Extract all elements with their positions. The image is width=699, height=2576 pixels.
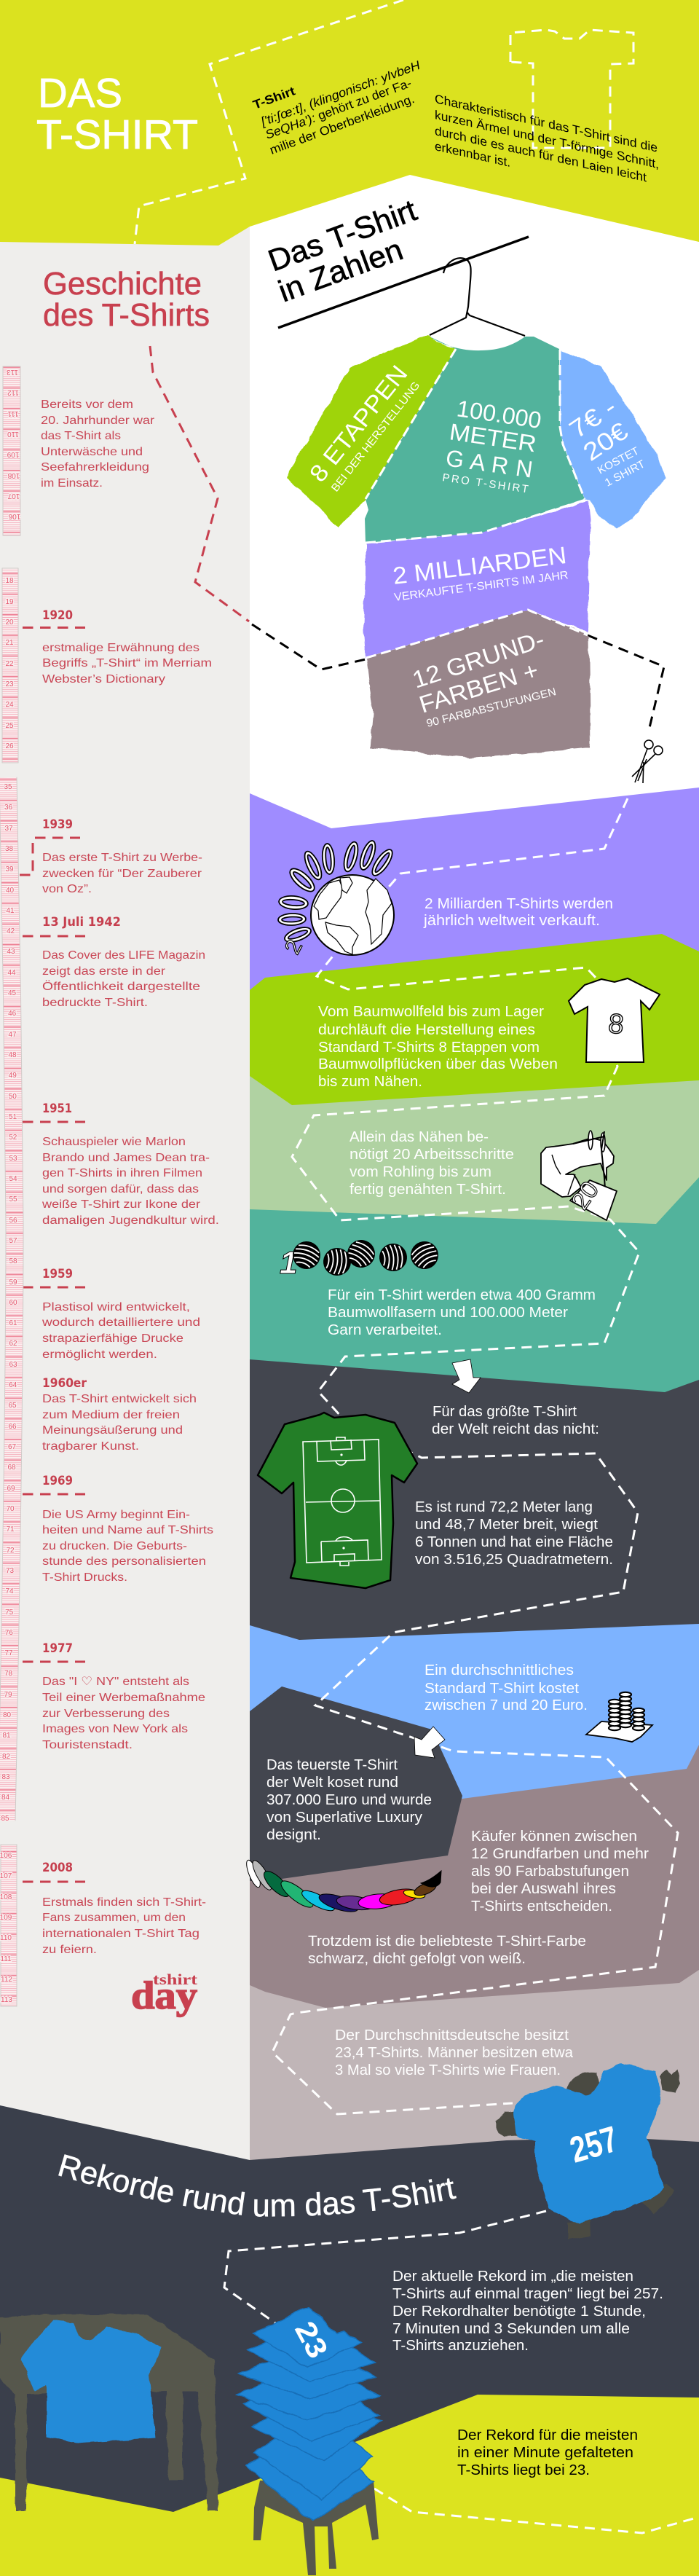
text: 20 Arbeitsschritte <box>350 1129 514 1198</box>
label: 100.000 Meter Garn <box>441 395 543 496</box>
label: price: 20€ <box>578 417 633 467</box>
timeline 1939: Das erste T-Shirt zu Werbe- <box>42 852 202 864</box>
text: price <box>424 1662 588 1713</box>
panel: purple band <box>250 788 699 1020</box>
timeline 2008 <box>23 1861 206 1956</box>
text: record 257: 7 Minuten und 3 Sekunden um alle <box>392 2321 630 2337</box>
measuring tape 3: 62 <box>9 1340 17 1348</box>
label: 12 Grundfarben: 90 FARBABSTUFUNGEN <box>425 686 558 730</box>
timeline 1951: damaligen Jugendkultur wird. <box>42 1214 219 1227</box>
text: price: Standard T-Shirt kostet <box>424 1681 579 1697</box>
measuring tape 3: 73 <box>6 1567 14 1575</box>
title: T-SHIRT <box>36 111 198 158</box>
text: colours: T-Shirts entscheiden. <box>471 1898 612 1915</box>
timeline 2008: internationalen T-Shirt Tag <box>42 1928 200 1940</box>
text: yarn: Baumwollfasern und 100.000 Meter <box>328 1305 568 1321</box>
text: most expensive shirt <box>266 1757 432 1843</box>
text: 8 Etappen <box>318 1004 558 1090</box>
measuring tape 1: 107 <box>7 492 20 500</box>
measuring tape 3: 55 <box>9 1195 17 1203</box>
text: most expensive shirt: der Welt koset rund <box>266 1775 398 1791</box>
characteristic text: erkennbar ist. <box>435 138 510 170</box>
blue shirt <box>514 2064 664 2223</box>
text: record 23: T-Shirts liegt bei 23. <box>457 2462 590 2478</box>
panel: light mauve band <box>250 1960 699 2171</box>
panel: yellow footer <box>0 2395 699 2576</box>
mauve hem: colours <box>366 610 591 758</box>
measuring tape 1 <box>3 366 20 535</box>
title <box>36 70 198 158</box>
text: most expensive shirt: 307.000 Euro und wurde <box>266 1792 432 1808</box>
measuring tape 3: 83 <box>1 1773 10 1781</box>
label: 2 Milliarden: 2 MILLIARDEN <box>391 541 568 589</box>
measuring tape 2: 23 <box>5 680 14 688</box>
timeline 1960er: tragbarer Kunst. <box>42 1440 139 1453</box>
earth <box>311 875 394 955</box>
timeline 1960er: zum Medium der freien <box>42 1409 180 1421</box>
panel: dark band with most expensive shirt <box>250 1686 462 1881</box>
measuring tape 2: 19 <box>5 598 14 606</box>
text: 20 Arbeitsschritte: vom Rohling bis zum <box>350 1164 491 1180</box>
timeline 1951: weiße T-Shirt zur Ikone der <box>42 1198 201 1211</box>
text: German average <box>335 2027 574 2078</box>
text: largest shirt facts: und 48,7 Meter breit, wiegt <box>415 1517 598 1533</box>
number 257: 257 <box>566 2118 623 2171</box>
measuring tape 3: 52 <box>9 1134 17 1142</box>
panel: blue band <box>250 1617 699 1814</box>
timeline 1942: Öffentlichkeit dargestellte <box>42 980 200 993</box>
measuring tape 4: 110 <box>0 1934 12 1942</box>
measuring tape 3: 65 <box>8 1402 17 1410</box>
text: record 23: Der Rekord für die meisten <box>457 2427 638 2443</box>
panel: mauve band <box>250 1745 699 2008</box>
timeline 1959: 1959 <box>42 1267 73 1281</box>
text: German average: Der Durchschnittsdeutsche besitzt <box>335 2027 569 2043</box>
panel: grey paper history column <box>0 227 250 2160</box>
measuring tape 3: 54 <box>9 1175 17 1183</box>
timeline 1969: T-Shirt Drucks. <box>42 1571 127 1584</box>
measuring tape 1: 112 <box>7 388 19 396</box>
icon: coins and banknotes <box>586 1692 652 1742</box>
text: most expensive shirt: designt. <box>266 1827 321 1843</box>
icon: person wearing 257 shirts <box>495 2064 681 2240</box>
heading: Rekorde rund um das T-Shirt: Rekorde rund um das T-Shirt <box>58 2154 457 2217</box>
timeline 1951: Schauspieler wie Marlon <box>42 1136 186 1148</box>
timeline 1969: stunde des personalisierten <box>42 1555 206 1568</box>
measuring tape 3: 51 <box>9 1113 17 1121</box>
dashed stitch: header white <box>135 0 403 244</box>
timeline 1959 <box>23 1267 200 1361</box>
measuring tape 4: 112 <box>1 1976 12 1984</box>
label: price: 7€ - <box>564 393 622 444</box>
label: 8 Etappen: 8 ETAPPEN <box>304 360 413 487</box>
measuring tape 3: 72 <box>6 1547 15 1555</box>
text: record 257: T-Shirts auf einmal tragen“ liegt bei 257. <box>392 2286 663 2302</box>
text: yarn: Für ein T-Shirt werden etwa 400 Gramm <box>328 1287 596 1303</box>
measuring tape 3: 36 <box>4 804 12 812</box>
text: colours: 12 Grundfarben und mehr <box>471 1846 649 1862</box>
measuring tape 3: 67 <box>8 1443 16 1451</box>
timeline 1969: zu drucken. Die Geburts- <box>42 1540 187 1552</box>
timeline 1951: gen T-Shirts in ihren Filmen <box>42 1167 202 1179</box>
measuring tape 3: 64 <box>9 1381 17 1389</box>
definition text: T-Shirt <box>251 84 297 112</box>
panel: dark records section <box>0 2105 699 2521</box>
background: yellow header <box>0 0 699 251</box>
measuring tape 1: 109 <box>7 450 19 458</box>
measuring tape 3: 82 <box>2 1753 10 1761</box>
measuring tape 4 <box>0 1845 17 2006</box>
timeline 1959: ermöglicht werden. <box>42 1348 157 1361</box>
measuring tape 3 <box>1 777 17 1823</box>
timeline 1939: 1939 <box>42 817 73 832</box>
timeline 1951: 1951 <box>42 1102 72 1116</box>
zeros and two <box>278 839 396 945</box>
heading: Geschichte des T-Shirts <box>43 266 210 333</box>
icon: globe with 2.000.000.000 <box>278 839 396 958</box>
measuring tape 4: 113 <box>1 1996 12 2004</box>
history intro text: das T-Shirt als <box>41 430 121 442</box>
hands, feet and head <box>495 2069 681 2240</box>
label: 100.000 Meter Garn: PRO T-SHIRT <box>441 471 529 496</box>
timeline 1951: und sorgen dafür, dass das <box>42 1183 199 1195</box>
text: price: Ein durchschnittliches <box>424 1662 574 1678</box>
icon: yarn balls 100.000: 1 <box>280 1245 297 1281</box>
icon: football pitch t-shirt <box>258 1413 417 1588</box>
timeline 1959: wodurch detailliertere und <box>42 1316 200 1329</box>
label: price: KOSTET <box>596 444 641 477</box>
measuring tape 2: 21 <box>5 639 14 647</box>
measuring tape 3: 59 <box>9 1279 17 1287</box>
heading: Geschichte des T-Shirts: des T-Shirts <box>43 297 210 333</box>
measuring tape 3: 58 <box>9 1257 17 1265</box>
shirt dashes <box>366 349 588 658</box>
label: 100.000 Meter Garn: G A R N <box>444 444 534 483</box>
history intro text: 20. Jahrhunder war <box>41 415 155 427</box>
text: 20 Arbeitsschritte: fertig genähten T-Shirt. <box>350 1182 506 1198</box>
label: price: 1 SHIRT <box>603 458 647 490</box>
measuring tape 3: 53 <box>9 1155 17 1163</box>
label: 100.000 Meter Garn: 100.000 <box>455 395 543 433</box>
measuring tape 3: 78 <box>4 1670 12 1678</box>
label: 12 Grundfarben: 12 GRUND- <box>409 625 548 694</box>
icon: twisted colour rope <box>244 1858 441 1915</box>
timeline 1920: Webster’s Dictionary <box>42 673 165 686</box>
measuring tape 4: 107 <box>0 1872 12 1880</box>
text: most popular colour: schwarz, dicht gefolgt von weiß. <box>308 1951 526 1967</box>
measuring tape 3: 63 <box>9 1361 17 1369</box>
text: colours: als 90 Farbabstufungen <box>471 1864 629 1880</box>
definition text: SeQHa'): gehört zu der Fa- <box>264 76 414 142</box>
dashed stitch: white in records section <box>224 2211 546 2324</box>
definition text: ['ti:ʃœ:t], (klingonisch: yIvbeH <box>258 58 422 129</box>
dashed stitch: white in footer <box>374 2489 699 2533</box>
measuring tape 1: 113 <box>7 368 18 376</box>
digit two: 2 <box>280 936 307 958</box>
text: largest shirt facts: von 3.516,25 Quadratmetern. <box>415 1552 613 1568</box>
icon: sewing machine with 20 <box>541 1131 617 1220</box>
measuring tape 3: 43 <box>7 948 15 956</box>
icon: scissors <box>632 740 663 783</box>
panel: dark band largest shirt <box>250 1348 699 1640</box>
measuring tape 3: 84 <box>1 1794 9 1802</box>
measuring tape 3: 47 <box>8 1031 17 1039</box>
timeline 1920: 1920 <box>42 608 73 623</box>
timeline 1920: erstmalige Erwähnung des <box>42 642 200 654</box>
timeline 1942: 13 Juli 1942 <box>42 915 121 930</box>
measuring tape 1: 108 <box>7 471 20 479</box>
measuring tape 3: 70 <box>6 1505 15 1513</box>
number 23: 23 <box>288 2317 333 2363</box>
measuring tape 3: 60 <box>9 1299 17 1307</box>
text: yarn: Garn verarbeitet. <box>328 1322 442 1338</box>
label: 12 Grundfarben <box>409 625 558 730</box>
measuring tape 3: 45 <box>8 989 16 997</box>
timeline 1939 <box>20 817 202 895</box>
text: largest shirt facts: Es ist rund 72,2 Meter lang <box>415 1499 593 1515</box>
timeline 1942: Das Cover des LIFE Magazin <box>42 949 205 962</box>
measuring tape 3: 38 <box>5 845 13 853</box>
measuring tape 4: 111 <box>0 1955 12 1963</box>
timeline 2008: Fans zusammen, um den <box>42 1912 186 1924</box>
measuring tape 3: 57 <box>9 1237 17 1245</box>
text: 2 Milliarden <box>423 896 613 929</box>
measuring tape 3: 39 <box>5 865 14 873</box>
measuring tape 2: 18 <box>5 577 14 585</box>
arrow: down to largest shirt <box>452 1359 481 1393</box>
arrow: to most expensive shirt <box>414 1727 445 1758</box>
dashed stitch: t-shirt outline <box>510 30 633 148</box>
heading: Das T-Shirt in Zahlen: Das T-Shirt <box>264 192 422 278</box>
measuring tape 3: 46 <box>8 1010 17 1018</box>
icon: stack of folded shirts <box>237 2307 381 2521</box>
timeline 1960er: 1960er <box>42 1376 87 1391</box>
heading: Geschichte des T-Shirts: Geschichte <box>43 266 202 302</box>
measuring tape 4: 109 <box>0 1914 12 1922</box>
icon: table with folded shirt <box>0 2314 218 2510</box>
blue shirt on table <box>20 2320 162 2443</box>
text: 8 Etappen: Baumwollpflücken über das Weben <box>318 1056 558 1072</box>
title: DAS <box>38 70 122 117</box>
heading: Das T-Shirt in Zahlen: in Zahlen <box>274 232 407 308</box>
text: colours: bei der Auswahl ihres <box>471 1881 616 1897</box>
panel: green band <box>250 934 699 1105</box>
text: colours: Käufer können zwischen <box>471 1829 637 1845</box>
label: 2 Milliarden: VERKAUFTE T-SHIRTS IM JAHR <box>393 569 569 604</box>
text: largest shirt intro <box>432 1404 599 1437</box>
history intro text: im Einsatz. <box>41 477 103 490</box>
table <box>0 2314 218 2510</box>
measuring tape 3: 85 <box>1 1815 9 1823</box>
measuring tape 3: 40 <box>6 887 14 895</box>
timeline 1959: strapazierfähige Drucke <box>42 1332 183 1345</box>
text: record 257 <box>392 2269 663 2354</box>
label: 2 Milliarden <box>391 541 569 604</box>
text: largest shirt intro: Für das größte T-Shirt <box>433 1404 577 1420</box>
dashed stitch: black in numbers section <box>252 624 664 731</box>
characteristic text <box>435 91 659 185</box>
blue sleeve: price <box>560 350 666 529</box>
purple band: sold shirts <box>363 501 590 658</box>
text: record 23 <box>457 2427 638 2478</box>
timeline 1969: 1969 <box>42 1474 73 1488</box>
definition text <box>251 58 422 157</box>
text: yarn <box>328 1287 596 1338</box>
measuring tape 2: 26 <box>5 742 14 750</box>
text: 2 Milliarden: jährlich weltweit verkauft. <box>423 913 600 929</box>
characteristic text: Charakteristisch für das T-Shirt sind die <box>435 91 657 155</box>
timeline 1959: Plastisol wird entwickelt, <box>42 1301 190 1313</box>
timeline 1969 <box>23 1474 213 1584</box>
text: 8 Etappen: Vom Baumwollfeld bis zum Lager <box>318 1004 544 1020</box>
timeline 1977: Das "I ♡ NY" entsteht als <box>42 1676 189 1688</box>
measuring tape 1: 110 <box>7 430 19 438</box>
history intro text: Unterwäsche und <box>41 446 143 458</box>
text: record 257: Der aktuelle Rekord im „die meisten <box>392 2269 633 2285</box>
measuring tape 3: 61 <box>9 1319 17 1327</box>
measuring tape 3: 79 <box>4 1691 12 1699</box>
label: price <box>564 393 647 490</box>
text: colours <box>471 1829 649 1915</box>
measuring tape 2: 22 <box>5 660 14 668</box>
timeline 1942: bedruckte T-Shirt. <box>42 997 148 1009</box>
measuring tape 2: 20 <box>5 619 14 627</box>
icon: stool <box>253 2481 379 2575</box>
text: largest shirt facts: 6 Tonnen und hat eine Fläche <box>415 1534 613 1550</box>
text: 8 Etappen: durchläuft die Herstellung eines <box>318 1022 535 1038</box>
timeline 2008: 2008 <box>42 1861 73 1875</box>
text: most popular colour: Trotzdem ist die beliebteste T-Shirt-Farbe <box>308 1933 586 1949</box>
text: most expensive shirt: von Superlative Luxury <box>266 1810 422 1826</box>
label: 100.000 Meter Garn: METER <box>448 418 538 457</box>
timeline 1960er: Das T-Shirt entwickelt sich <box>42 1393 197 1405</box>
timeline 2008: zu feiern. <box>42 1944 97 1956</box>
timeline 1969: Die US Army beginnt Ein- <box>42 1509 190 1521</box>
measuring tape 3: 48 <box>8 1051 17 1059</box>
text: record 257: Der Rekordhalter benötigte 1 Stunde, <box>392 2304 646 2320</box>
timeline 1977: 1977 <box>42 1641 73 1656</box>
measuring tape 3: 76 <box>5 1629 13 1637</box>
timeline 1977: Teil einer Werbemaßnahme <box>42 1692 205 1704</box>
icon: sewing machine with 20: 20 <box>566 1177 604 1215</box>
measuring tape 3: 66 <box>8 1423 17 1431</box>
measuring tape 2 <box>2 568 18 763</box>
measuring tape 3: 41 <box>6 907 15 915</box>
measuring tape 3: 42 <box>7 927 15 935</box>
sleeve: 8 Etappen <box>286 335 456 529</box>
measuring tape 3: 50 <box>9 1093 17 1101</box>
timeline 1977: Touristenstadt. <box>42 1739 133 1751</box>
history intro text: Seefahrerkleidung <box>41 461 149 474</box>
measuring tape 3: 49 <box>9 1072 17 1080</box>
logo: tshirt day: day <box>131 1974 197 2017</box>
icon: white shirt with 8 <box>569 978 660 1062</box>
measuring tape 3: 77 <box>4 1649 13 1657</box>
panel: teal band <box>250 1166 699 1392</box>
hanger with rail <box>278 237 529 336</box>
icon: yarn balls 100.000 <box>280 1235 443 1281</box>
timeline 1977: Images von New York als <box>42 1723 188 1735</box>
text: price: zwischen 7 und 20 Euro. <box>424 1697 588 1713</box>
timeline 1969: heiten und Name auf T-Shirts <box>42 1524 213 1536</box>
timeline 1951 <box>23 1102 219 1227</box>
text: 2 Milliarden: 2 Milliarden T-Shirts werden <box>424 896 613 912</box>
panel: pale green band <box>250 1064 699 1224</box>
timeline 1920: Begriffs „T-Shirt“ im Merriam <box>42 657 212 669</box>
timeline 1939: von Oz”. <box>42 883 92 895</box>
measuring tape 2: 25 <box>5 722 14 730</box>
characteristic text: kurzen Ärmel und der T-förmige Schnitt, <box>435 107 659 171</box>
measuring tape 3: 37 <box>4 825 13 833</box>
history intro text <box>41 398 155 490</box>
text: largest shirt facts <box>415 1499 613 1568</box>
timeline 1960er <box>42 1376 197 1453</box>
text: German average: 23,4 T-Shirts. Männer besitzen etwa <box>335 2045 574 2061</box>
timeline 1951: Brando und James Dean tra- <box>42 1152 210 1164</box>
measuring tape 3: 81 <box>2 1732 11 1740</box>
measuring tape 3: 35 <box>4 783 12 791</box>
measuring tape 4: 108 <box>0 1893 12 1901</box>
logo: tshirt day: tshirt <box>153 1971 197 1988</box>
timeline 1942 <box>23 915 205 1009</box>
text: largest shirt intro: der Welt reicht das nicht: <box>432 1421 599 1437</box>
panel: white numbers section <box>250 175 699 838</box>
measuring tape 1: 106 <box>8 512 20 520</box>
text: most expensive shirt: Das teuerste T-Shirt <box>266 1757 398 1773</box>
timeline 1977 <box>23 1641 205 1751</box>
pitch lines <box>303 1437 382 1566</box>
label: 12 Grundfarben: FARBEN + <box>416 656 542 718</box>
measuring tape 3: 44 <box>7 969 16 977</box>
timeline 1939: zwecken für “Der Zauberer <box>42 868 202 880</box>
text: 20 Arbeitsschritte: Allein das Nähen be- <box>350 1129 489 1145</box>
measuring tape 3: 68 <box>7 1464 16 1472</box>
measuring tape 4: 106 <box>0 1852 12 1860</box>
measuring tape 3: 56 <box>9 1217 17 1225</box>
icon: white shirt with 8: 8 <box>607 1008 625 1040</box>
history intro text: Bereits vor dem <box>41 398 133 411</box>
measuring tape 3: 71 <box>6 1525 15 1534</box>
text: 8 Etappen: bis zum Nähen. <box>318 1074 422 1090</box>
timeline 2008: Erstmals finden sich T-Shirt- <box>42 1896 206 1909</box>
big t-shirt chart <box>286 335 666 758</box>
continents <box>314 877 392 954</box>
text: record 23: in einer Minute gefalteten <box>457 2445 633 2461</box>
text: record 257: T-Shirts anzuziehen. <box>392 2338 529 2354</box>
measuring tape 1: 111 <box>7 409 19 417</box>
dashed stitch: white through right column <box>272 798 678 2114</box>
text: most popular colour <box>308 1933 586 1967</box>
definition text: milie der Oberberkleidung. <box>268 92 416 157</box>
timeline 1960er: Meinungsäußerung und <box>42 1424 183 1437</box>
measuring tape 3: 75 <box>5 1609 14 1617</box>
measuring tape 3: 74 <box>5 1587 14 1595</box>
characteristic text: durch die es auch für den Laien leicht <box>435 123 647 185</box>
timeline 1942: zeigt das erste in der <box>42 965 166 978</box>
text: German average: 3 Mal so viele T-Shirts wie Frauen. <box>335 2062 561 2078</box>
label: 8 Etappen: BEI DER HERSTELLUNG <box>329 380 422 494</box>
text: 20 Arbeitsschritte: nötigt 20 Arbeitsschritte <box>350 1147 514 1163</box>
measuring tape 2: 24 <box>5 701 14 709</box>
dashed stitch: red in history column <box>150 346 249 621</box>
timeline 1977: zur Verbesserung des <box>42 1708 170 1720</box>
measuring tape 3: 69 <box>7 1485 15 1493</box>
text: 8 Etappen: Standard T-Shirts 8 Etappen vom <box>318 1040 540 1056</box>
teal body: yarn <box>365 337 585 543</box>
measuring tape 3: 80 <box>3 1711 11 1719</box>
timeline 1920 <box>23 608 212 686</box>
